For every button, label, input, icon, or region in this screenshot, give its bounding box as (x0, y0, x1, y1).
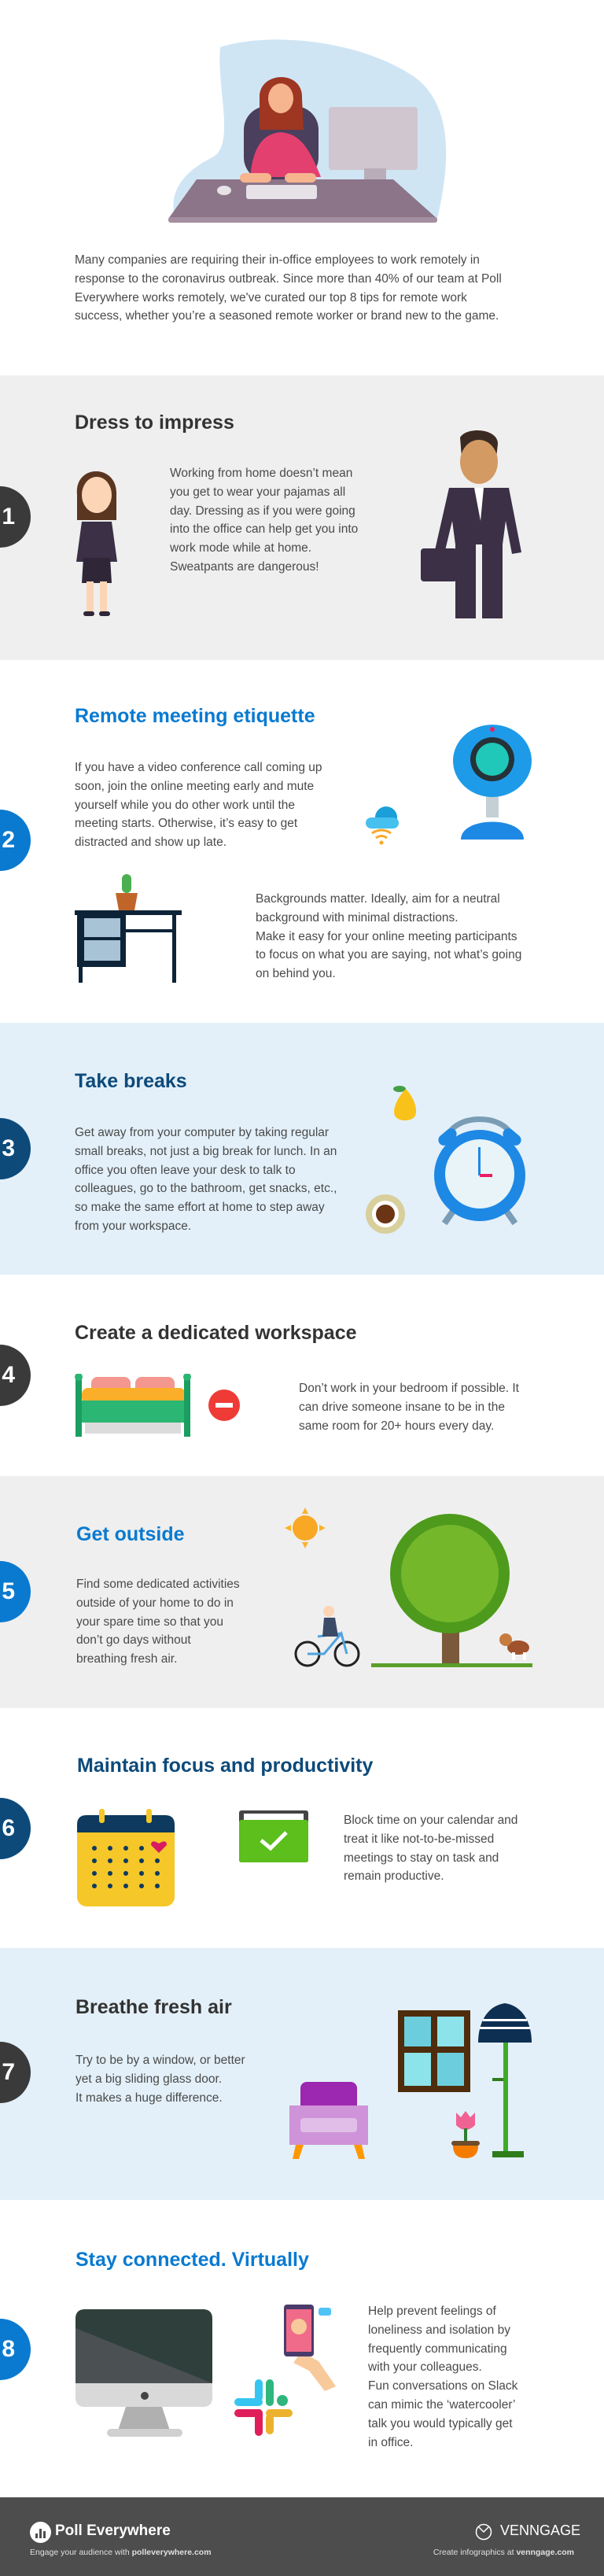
text (170, 467, 358, 574)
text: Fun conversations on Slack (368, 2379, 517, 2393)
number 4 (0, 1345, 31, 1406)
panel: 4 dedicated workspace (0, 1275, 604, 1476)
text: you get to wear your pajamas all (170, 485, 345, 499)
number 2 (0, 810, 31, 871)
text: work mode while at home. (170, 541, 311, 555)
panel: 1 dress to impress (0, 375, 604, 660)
heading: Dress to impress (75, 411, 234, 434)
heading: Create a dedicated workspace (75, 1322, 357, 1344)
text block 2: to focus on what you are saying, not what’s going (256, 948, 521, 961)
text block 1: yourself while you do other work until the (75, 799, 295, 812)
icon: cyclist (294, 1606, 360, 1666)
text: in office. (368, 2436, 413, 2449)
footer: poll everywhere logo (30, 2522, 171, 2543)
heading: Remote meeting etiquette (75, 705, 315, 727)
number 8: 8 (2, 2336, 15, 2362)
icon: businessman (421, 430, 521, 618)
heading: Take breaks (75, 1070, 187, 1092)
text: Try to be by a window, or better (76, 2054, 245, 2067)
intro text: response to the coronavirus outbreak. Since more than 40% of our team at Poll (75, 272, 502, 286)
text: office you often leave your desk to talk to (75, 1164, 296, 1177)
number 5: 5 (2, 1578, 15, 1604)
text block 1 (75, 761, 322, 849)
icon: folder check (239, 1810, 308, 1862)
text (76, 2054, 245, 2105)
text: treat it like not-to-be-missed (344, 1832, 494, 1846)
icon: slack logo (234, 2379, 293, 2436)
number 2: 2 (2, 827, 15, 853)
text: Don’t work in your bedroom if possible. It (299, 1382, 519, 1395)
panel: 2 remote meeting etiquette (0, 660, 604, 1023)
text: yet a big sliding glass door. (76, 2072, 222, 2086)
number 6 (0, 1798, 31, 1859)
icon: webcam (453, 725, 532, 840)
number 7: 7 (2, 2059, 15, 2085)
text block 1: If you have a video conference call coming up (75, 761, 322, 774)
number 3: 3 (2, 1135, 15, 1161)
text: day. Dressing as if you were going (170, 504, 355, 518)
icon: armchair (289, 2082, 368, 2159)
text: into the office can help get you into (170, 522, 358, 536)
footer (0, 2497, 604, 2576)
text: colleagues, go to the bathroom, get snacks, etc., (75, 1182, 337, 1195)
face (268, 83, 293, 113)
text block 1: distracted and show up late. (75, 836, 226, 849)
icon: sun (285, 1508, 326, 1548)
icon: alarm clock (434, 1116, 525, 1225)
text: Sweatpants are dangerous! (170, 560, 319, 574)
text: can mimic the ‘watercooler’ (368, 2398, 516, 2412)
icon: tree (371, 1514, 532, 1667)
number 7 (0, 2042, 31, 2103)
number 6: 6 (2, 1815, 15, 1841)
icon: floor lamp (478, 2003, 532, 2157)
icon: calendar (77, 1809, 175, 1906)
number 4: 4 (2, 1362, 15, 1388)
text: Block time on your calendar and (344, 1814, 517, 1827)
number 5 (0, 1561, 31, 1622)
text: don’t go days without (76, 1633, 191, 1647)
panel: 8 stay connected (0, 2200, 604, 2498)
text: same room for 20+ hours every day. (299, 1419, 494, 1433)
text (75, 1126, 337, 1233)
icon: bed (75, 1374, 191, 1437)
text block 2 (256, 892, 521, 980)
number 1 (0, 486, 31, 548)
hair (260, 77, 304, 130)
panel: 3 take breaks (0, 1023, 604, 1275)
body (250, 132, 321, 177)
text block 2: background with minimal distractions. (256, 911, 459, 924)
text: with your colleagues. (368, 2360, 482, 2374)
icon: desktop monitor (76, 2309, 212, 2437)
text: Find some dedicated activities (76, 1578, 240, 1591)
icon: no entry (208, 1389, 240, 1421)
text: breathing fresh air. (76, 1652, 177, 1666)
intro text: Many companies are requiring their in-office employees to work remotely in (75, 253, 480, 267)
icon: phone video call (284, 2305, 336, 2391)
intro text: Everywhere works remotely, we've curated our top 8 tips for remote work (75, 291, 467, 304)
text: talk you would typically get (368, 2417, 513, 2430)
chair (244, 106, 319, 181)
text: Working from home doesn’t mean (170, 467, 352, 480)
text: outside of your home to do in (76, 1596, 234, 1610)
icon: woman (76, 471, 117, 616)
text (299, 1382, 519, 1433)
icon: cloud wifi (366, 806, 399, 845)
text: It makes a huge difference. (76, 2091, 223, 2105)
panel: 6 maintain focus (0, 1708, 604, 1948)
panel: 5 get outside (0, 1476, 604, 1708)
text (368, 2305, 517, 2449)
text block 2: Backgrounds matter. Ideally, aim for a neutral (256, 892, 500, 906)
monitor (329, 107, 418, 170)
text block 1: soon, join the online meeting early and mute (75, 780, 314, 793)
footer: venngage logo: VENNGAGE (500, 2522, 580, 2538)
footer: venngage logo (475, 2522, 580, 2540)
panel: 7 breathe fresh air (0, 1948, 604, 2200)
intro text (75, 253, 502, 323)
heading: Stay connected. Virtually (76, 2249, 309, 2271)
text: Get away from your computer by taking regular (75, 1126, 329, 1139)
text (344, 1814, 517, 1883)
icon: dog (499, 1633, 529, 1660)
number 3 (0, 1118, 31, 1179)
text: meetings to stay on task and (344, 1851, 499, 1865)
text: your spare time so that you (76, 1615, 223, 1629)
text block 2: on behind you. (256, 967, 336, 980)
footer: right tagline: Create infographics at venngage.com (433, 2548, 574, 2557)
text: remain productive. (344, 1869, 444, 1883)
number 8 (0, 2319, 31, 2380)
blob (173, 39, 446, 222)
icon: flower pot (451, 2111, 480, 2158)
desk (168, 179, 437, 219)
hero illustration (168, 39, 447, 223)
text: frequently communicating (368, 2342, 507, 2356)
footer: poll everywhere logo: Poll Everywhere (55, 2522, 171, 2539)
text: so make the same effort at home to step away (75, 1201, 325, 1214)
heading: Breathe fresh air (76, 1996, 232, 2018)
footer: left tagline: Engage your audience with polleverywhere.com (30, 2548, 212, 2557)
number 1: 1 (2, 504, 15, 530)
icon: coffee (366, 1194, 405, 1234)
intro text: success, whether you’re a seasoned remote worker or brand new to the game. (75, 309, 499, 323)
text (76, 1578, 240, 1666)
text: Help prevent feelings of (368, 2305, 496, 2318)
text: from your workspace. (75, 1220, 191, 1233)
icon: desk with cactus (75, 874, 182, 983)
heading: Maintain focus and productivity (77, 1755, 373, 1777)
text block 2: Make it easy for your online meeting participants (256, 930, 517, 943)
heading: Get outside (76, 1523, 185, 1545)
text: loneliness and isolation by (368, 2323, 510, 2337)
text: can drive someone insane to be in the (299, 1401, 505, 1414)
text: small breaks, not just a big break for lunch. In an (75, 1145, 337, 1158)
icon: window (398, 2010, 470, 2092)
icon: pear (393, 1086, 417, 1120)
text block 1: meeting starts. Otherwise, it’s easy to get (75, 817, 297, 830)
